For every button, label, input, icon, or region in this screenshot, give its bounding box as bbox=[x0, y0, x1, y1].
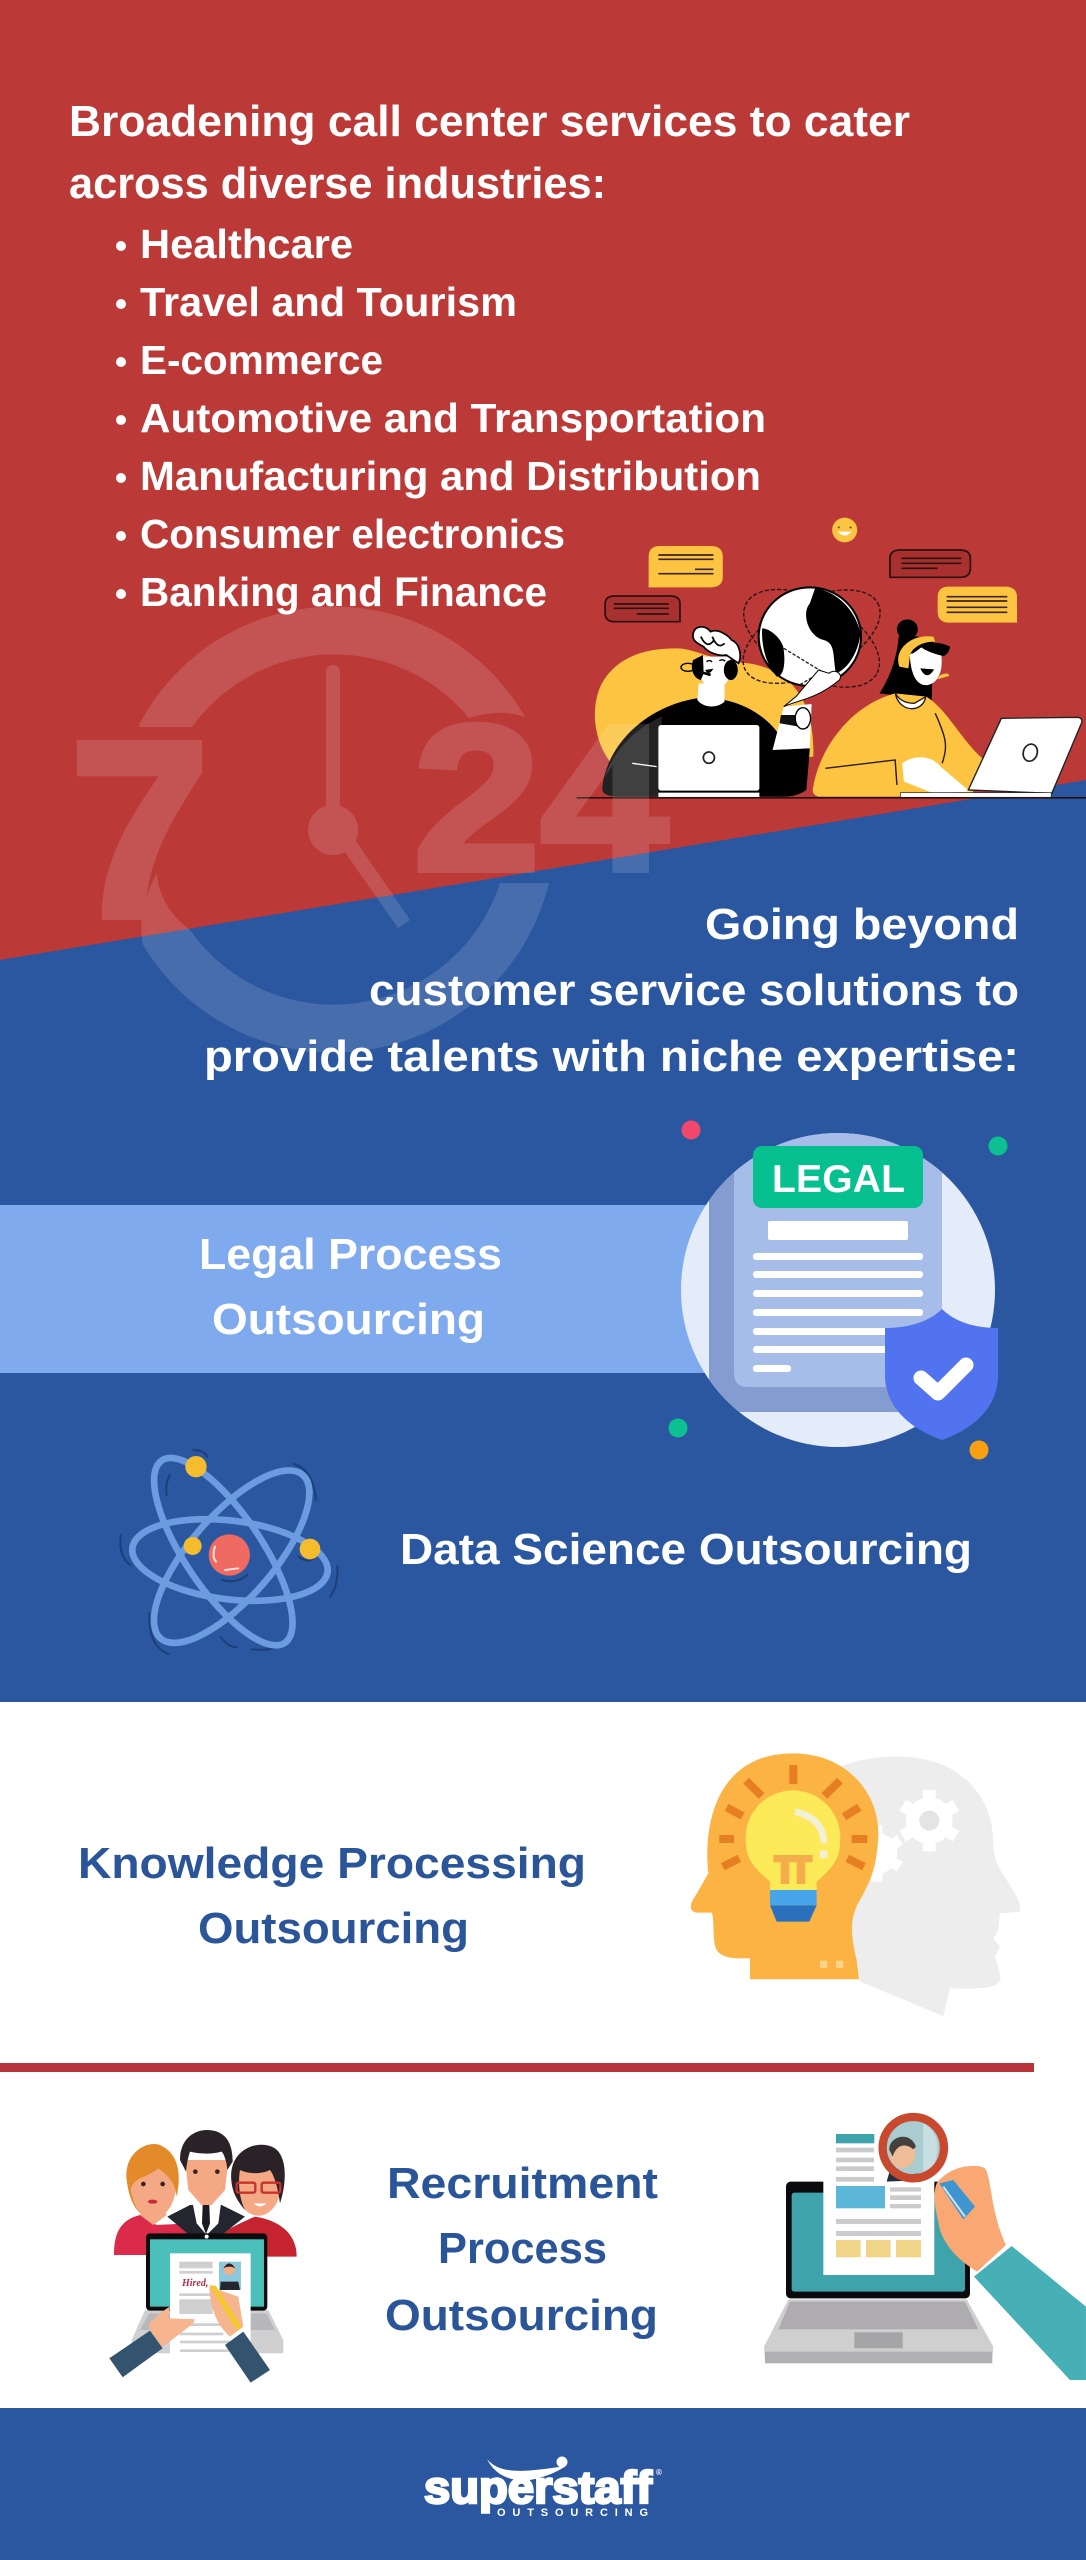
heading: diverse industries bbox=[69, 97, 910, 208]
heading: diverse industries: across diverse industries: bbox=[69, 159, 606, 208]
list: industries: E-commerce bbox=[140, 337, 383, 383]
icon: hiring team with laptop bbox=[109, 2130, 297, 2383]
icon: heads with light bulb and gear bbox=[691, 1753, 1020, 2016]
laptop bbox=[764, 2182, 993, 2363]
illustration: call center agents with globe bbox=[577, 518, 1086, 799]
heading: diverse industries: Broadening call center services to cater bbox=[69, 97, 910, 146]
hand bbox=[935, 2166, 1006, 2272]
footer band bbox=[0, 2408, 1086, 2560]
label: legal process outsourcing: Legal Process bbox=[199, 1230, 502, 1279]
label: legal process outsourcing: Outsourcing bbox=[212, 1295, 485, 1344]
heading: going beyond: customer service solutions to bbox=[369, 966, 1019, 1015]
label: recruitment process outsourcing bbox=[385, 2159, 658, 2340]
label: legal process outsourcing bbox=[199, 1230, 502, 1344]
person center bbox=[167, 2130, 245, 2235]
logo: superstaff outsourcing: OUTSOURCING bbox=[497, 2507, 648, 2519]
icon: laptop with resume and magnifier bbox=[764, 2117, 1086, 2380]
list: industries: Travel and Tourism bbox=[140, 279, 517, 325]
band: legal process outsourcing bbox=[0, 1205, 720, 1373]
resume bbox=[170, 2253, 251, 2355]
panel: white lower section bbox=[0, 1702, 1086, 2408]
clock hands bbox=[326, 665, 340, 815]
sleeve bbox=[974, 2246, 1086, 2380]
number twenty four: 24 bbox=[413, 683, 668, 915]
heading: going beyond: provide talents with niche expertise: bbox=[204, 1032, 1019, 1081]
person left bbox=[114, 2144, 189, 2255]
list: industries: Healthcare bbox=[140, 221, 353, 267]
label: recruitment process outsourcing: Outsourcing bbox=[385, 2291, 658, 2340]
panel: blue diagonal section bbox=[0, 780, 1086, 1702]
desk line bbox=[577, 797, 1086, 799]
label: data science outsourcing: Data Science Outsourcing bbox=[400, 1525, 972, 1574]
heading: going beyond: Going beyond bbox=[705, 900, 1019, 949]
agent: man bbox=[602, 627, 840, 797]
hands bbox=[109, 2285, 270, 2383]
globe bbox=[759, 587, 861, 686]
list: industries bbox=[116, 221, 766, 615]
agent: woman bbox=[813, 619, 1082, 797]
speech bubbles bbox=[605, 546, 1017, 623]
divider: red rule bbox=[0, 2063, 1034, 2072]
icon: legal document with shield: LEGAL bbox=[772, 1158, 905, 1201]
magnifier bbox=[883, 2117, 975, 2219]
list: industries: Consumer electronics bbox=[140, 511, 565, 557]
icon: legal document with shield bbox=[668, 1120, 1008, 1460]
list: industries: Manufacturing and Distribution bbox=[140, 453, 761, 499]
label: knowledge processing outsourcing: Knowledge Processing bbox=[78, 1839, 586, 1888]
resume sheet bbox=[823, 2128, 934, 2275]
smiley bbox=[832, 518, 857, 542]
globe orbits bbox=[727, 569, 896, 707]
label: knowledge processing outsourcing bbox=[78, 1839, 586, 1953]
resume: Hired, bbox=[181, 2278, 208, 2289]
panel: red top background bbox=[0, 0, 1086, 962]
label: recruitment process outsourcing: Recruitment bbox=[387, 2159, 658, 2208]
watermark: 24/7 clock bbox=[70, 607, 668, 1053]
label: knowledge processing outsourcing: Outsourcing bbox=[198, 1904, 469, 1953]
logo: superstaff outsourcing: ® bbox=[656, 2468, 662, 2477]
number seven: 7 bbox=[70, 690, 209, 969]
list: industries: Banking and Finance bbox=[140, 569, 547, 615]
icon: atom bbox=[120, 1439, 337, 1666]
heading: going beyond bbox=[204, 900, 1019, 1081]
clock ring bbox=[138, 607, 525, 727]
logo: superstaff outsourcing: superstaff bbox=[424, 2462, 653, 2513]
person right bbox=[223, 2145, 297, 2257]
laptop bbox=[132, 2233, 283, 2353]
list: industries: Automotive and Transportation bbox=[140, 395, 766, 441]
label: recruitment process outsourcing: Process bbox=[438, 2224, 607, 2273]
yellow blob bbox=[595, 648, 813, 767]
